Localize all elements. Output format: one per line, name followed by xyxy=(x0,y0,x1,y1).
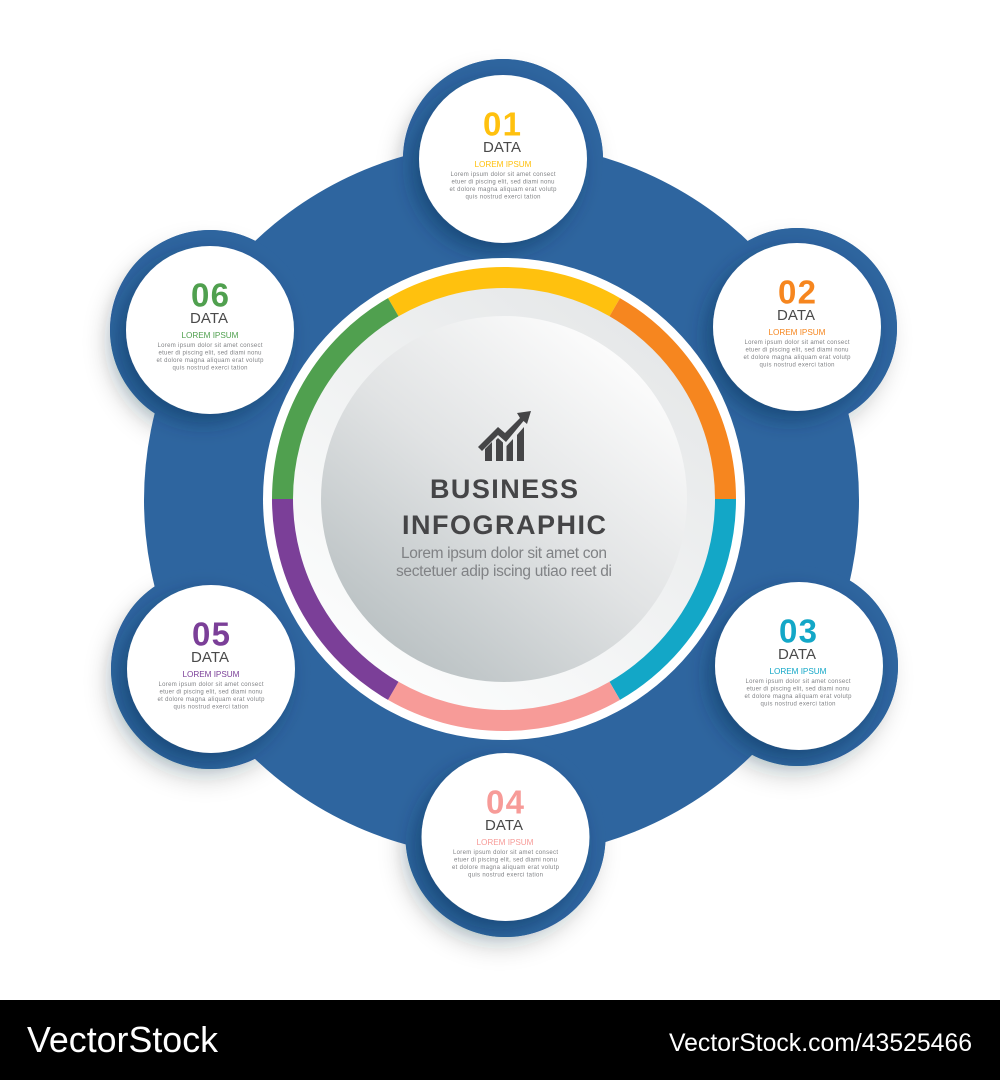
ring segment: orange xyxy=(615,307,726,499)
footer logo text: VectorStock xyxy=(27,1019,219,1060)
node 06 badge: DATA xyxy=(190,310,228,327)
footer bar xyxy=(0,1000,1000,1080)
node 06 badge: et dolore magna aliquam erat volutp xyxy=(156,358,264,364)
node 04 badge: quis nostrud exerci tation xyxy=(468,872,543,878)
node 05 badge: etuer di piscing elit, sed diami nonu xyxy=(160,690,262,696)
node 05 badge xyxy=(111,569,311,769)
ring segment: purple xyxy=(282,499,393,691)
center description xyxy=(396,545,612,580)
node 01 badge: Lorem ipsum dolor sit amet consect xyxy=(450,172,556,178)
node 06 badge: etuer di piscing elit, sed diami nonu xyxy=(158,350,262,356)
ring segment: pink xyxy=(393,691,615,720)
node 03 badge: etuer di piscing elit, sed diami nonu xyxy=(746,686,850,692)
node 04 badge: etuer di piscing elit, sed diami nonu xyxy=(454,858,557,864)
node 05 badge: quis nostrud exerci tation xyxy=(174,704,248,710)
node 01 badge: etuer di piscing elit, sed diami nonu xyxy=(452,180,554,186)
node 05 badge: et dolore magna aliquam erat volutp xyxy=(158,697,265,703)
center heading: INFOGRAPHIC xyxy=(402,510,606,540)
node 06 badge xyxy=(110,230,310,430)
node 04 badge: DATA xyxy=(485,817,523,834)
node 02 badge: quis nostrud exerci tation xyxy=(760,362,834,368)
node 03 badge: et dolore magna aliquam erat volutp xyxy=(744,694,852,700)
node 03 badge: quis nostrud exerci tation xyxy=(760,701,836,707)
node 06 badge: quis nostrud exerci tation xyxy=(172,365,248,371)
node 04 badge: et dolore magna aliquam erat volutp xyxy=(452,865,560,871)
node 01 badge: LOREM IPSUM xyxy=(474,160,532,169)
ring segment: green xyxy=(282,307,393,499)
node 05 badge: LOREM IPSUM xyxy=(182,670,240,679)
node 03 badge: LOREM IPSUM xyxy=(770,667,827,676)
footer image id: VectorStock.com/43525466 xyxy=(669,1029,972,1057)
node 04 badge xyxy=(406,737,606,937)
node 06 badge: Lorem ipsum dolor sit amet consect xyxy=(158,343,263,349)
node 02 badge xyxy=(697,228,897,428)
ring segment: teal xyxy=(615,499,726,691)
node 01 badge xyxy=(403,59,603,259)
center white ring xyxy=(263,258,745,740)
center plate xyxy=(292,287,716,711)
icon: rising chart with arrow xyxy=(478,411,531,461)
center description: Lorem ipsum dolor sit amet con xyxy=(401,545,607,562)
node 06 badge: 06 xyxy=(191,276,229,314)
badge shadows on background xyxy=(110,59,898,937)
node 06 badge: LOREM IPSUM xyxy=(182,331,239,340)
node 02 badge: Lorem ipsum dolor sit amet consect xyxy=(744,340,850,346)
center description: sectetuer adip iscing utiao reet di xyxy=(396,563,612,580)
node 02 badge: etuer di piscing elit, sed diami nonu xyxy=(746,348,848,354)
node 02 badge: LOREM IPSUM xyxy=(768,328,826,337)
node 03 badge xyxy=(698,566,898,766)
segmented colour ring xyxy=(282,278,726,720)
node 02 badge: DATA xyxy=(777,307,815,324)
node 03 badge: DATA xyxy=(778,646,816,663)
node 01 badge: quis nostrud exerci tation xyxy=(466,194,540,200)
node 04 badge: Lorem ipsum dolor sit amet consect xyxy=(453,850,558,856)
node 05 badge: Lorem ipsum dolor sit amet consect xyxy=(158,682,264,688)
center heading: BUSINESS xyxy=(430,474,578,504)
node 02 badge: et dolore magna aliquam erat volutp xyxy=(744,355,851,361)
node 05 badge: 05 xyxy=(192,616,230,652)
node 03 badge: Lorem ipsum dolor sit amet consect xyxy=(746,679,851,685)
node 01 badge: DATA xyxy=(483,139,521,156)
node 05 badge: DATA xyxy=(191,649,229,666)
center grey disc xyxy=(321,316,687,682)
node 01 badge: 01 xyxy=(483,106,521,142)
node 01 badge: et dolore magna aliquam erat volutp xyxy=(450,187,557,193)
node 04 badge: 04 xyxy=(486,784,525,820)
center heading xyxy=(402,474,606,540)
node 03 badge: 03 xyxy=(779,612,817,650)
ring segment: yellow xyxy=(393,278,615,307)
node 02 badge: 02 xyxy=(778,274,816,310)
node 04 badge: LOREM IPSUM xyxy=(476,838,534,847)
big blue circle xyxy=(144,142,859,858)
